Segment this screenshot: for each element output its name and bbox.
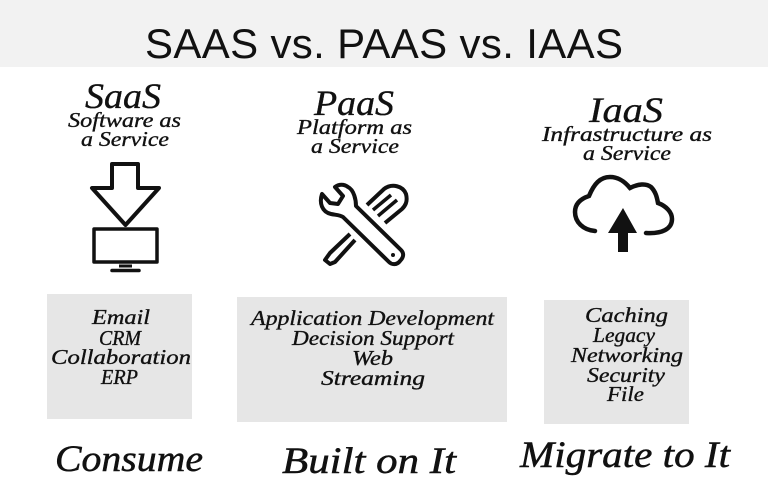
panel: PaaS heading: a Service (311, 134, 399, 158)
panel: PaaS heading (296, 83, 412, 158)
panel: SaaS heading (68, 76, 181, 151)
panel: IaaS heading: IaaS (588, 90, 663, 130)
panel: PaaS examples: Streaming (321, 366, 425, 390)
panel: PaaS examples (237, 297, 507, 422)
panel: SaaS examples (47, 294, 192, 419)
panel: IaaS examples (544, 300, 689, 424)
panel: IaaS heading (541, 90, 712, 165)
label: Migrate to It: Migrate to It (519, 435, 732, 476)
panel: IaaS heading: Infrastructure as (541, 122, 712, 146)
panel: SaaS examples: CRM (99, 326, 142, 350)
label: Consume: Consume (55, 439, 203, 480)
panel: SaaS examples: ERP (100, 365, 138, 389)
panel: IaaS heading: a Service (583, 141, 671, 165)
panel: IaaS examples: Legacy (592, 323, 656, 347)
panel: SaaS heading: a Service (81, 127, 169, 151)
icon: download arrow into monitor (92, 164, 159, 270)
label: Built on It: Built on It (282, 441, 458, 482)
panel: SaaS heading: Software as (68, 108, 181, 132)
panel: PaaS heading: PaaS (313, 83, 394, 123)
icon: cloud with up arrow (575, 177, 672, 252)
panel: IaaS examples: Caching (585, 303, 668, 327)
panel: IaaS examples: Security (587, 363, 666, 387)
panel: IaaS examples: File (606, 382, 644, 406)
panel: PaaS examples: Web (352, 346, 393, 370)
panel: SaaS heading: SaaS (85, 76, 161, 116)
panel: PaaS examples: Application Development (249, 306, 495, 330)
panel: PaaS heading: Platform as (296, 115, 412, 139)
panel: PaaS examples: Decision Support (291, 326, 455, 350)
icon: wrench and screwdriver (321, 185, 407, 264)
title banner: SAAS vs. PAAS vs. IAAS (145, 20, 623, 67)
panel: IaaS examples: Networking (570, 343, 683, 367)
panel: SaaS examples: Collaboration (51, 345, 191, 369)
title banner (0, 0, 768, 67)
panel: SaaS examples: Email (91, 305, 150, 329)
